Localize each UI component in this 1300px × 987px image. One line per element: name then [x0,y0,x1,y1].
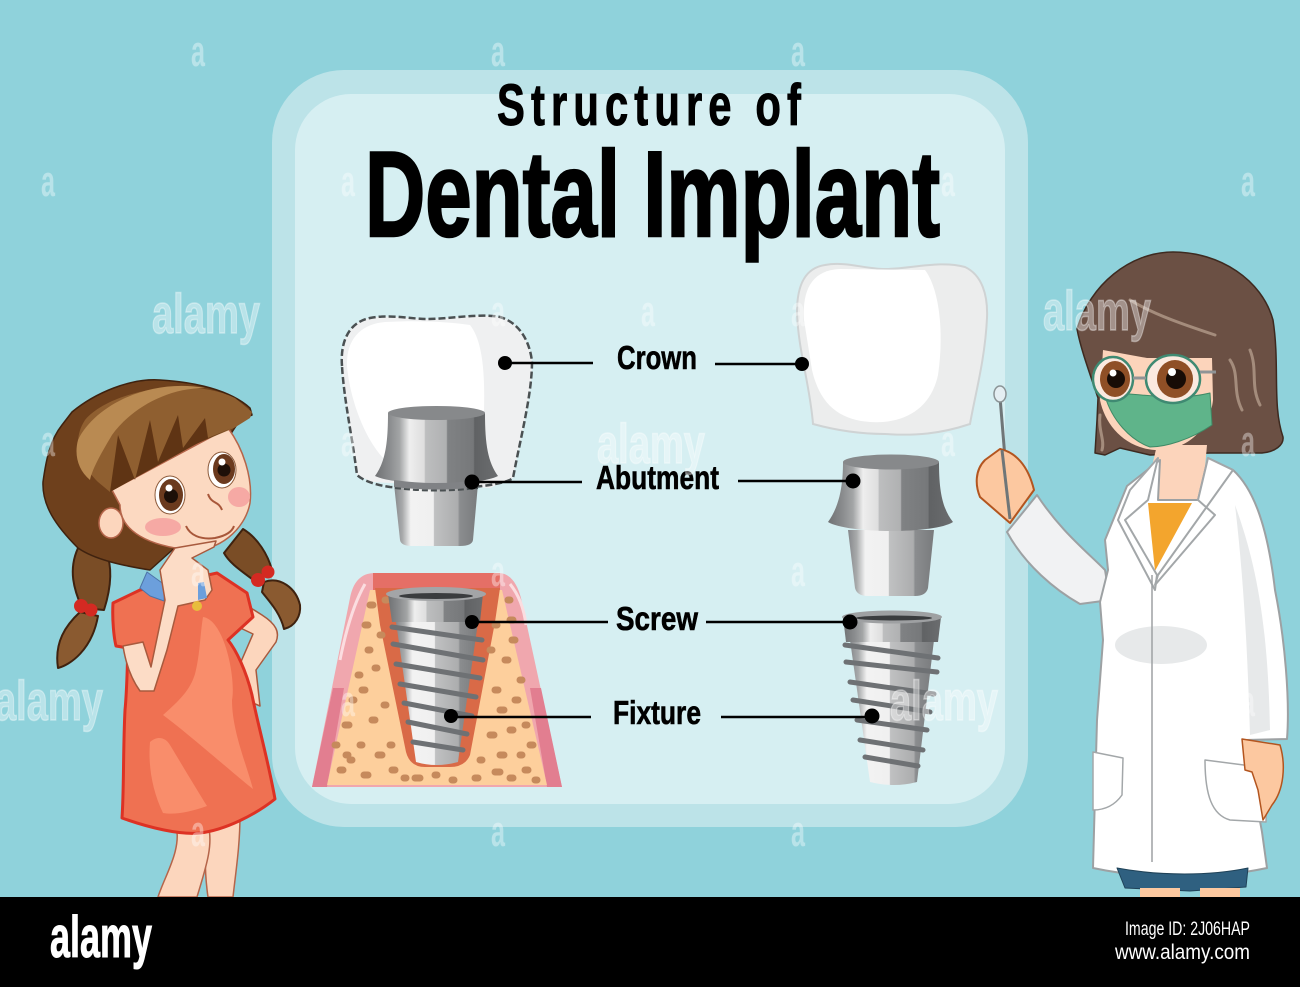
watermarks: alamy [890,669,998,732]
hair highlight [76,386,205,480]
neck [1143,445,1207,513]
girl character [43,380,300,897]
right braid [224,529,300,629]
raised hand [977,449,1034,523]
abutment [375,406,498,546]
watermarks: a [641,287,655,336]
raised arm and hand [123,541,216,691]
pockets [1093,752,1267,822]
part labels: Screw [616,600,698,637]
skirt [1117,868,1248,891]
shirt [1148,503,1192,571]
coat [1093,458,1288,877]
hair strands [110,415,232,492]
watermarks: a [791,287,805,336]
hair [1077,252,1283,455]
dress [113,573,275,833]
part labels: Abutment [596,459,719,496]
face [1100,350,1213,450]
crown with dashed outline [342,316,532,488]
watermarks: a [191,547,205,596]
watermarks: a [941,417,955,466]
part labels [596,339,719,731]
watermarks: a [1241,417,1255,466]
watermarks: a [491,807,505,856]
dress highlight [150,617,253,814]
right arm [232,603,277,706]
watermarks: a [491,547,505,596]
title: Dental Implant [365,126,940,262]
watermarks: a [341,157,355,206]
watermarks: alamy [152,282,260,345]
hair shade and curls [1100,300,1260,450]
watermarks: a [491,287,505,336]
face [112,428,251,550]
watermarks: a [191,27,205,76]
diagram: separated implant parts [797,264,987,785]
watermarks: a [1241,157,1255,206]
watermarks: a [41,157,55,206]
mirror tool [994,386,1010,519]
nose and mouth [186,494,234,538]
panel: outer frame [272,70,1028,827]
legs [158,815,240,897]
watermarks: a [491,27,505,76]
screw and fixture [842,610,942,785]
panel: inner card [295,94,1005,804]
hair fringe [78,387,252,492]
watermarks: a [341,677,355,726]
coat shading [1115,505,1270,735]
part labels: Crown [617,339,697,376]
eyes [155,452,236,514]
website: www.alamy.com [1114,941,1250,964]
watermarks: a [41,417,55,466]
footer bar [0,897,1300,987]
watermarks: alamy [597,412,705,475]
glasses and eyes [1093,355,1216,403]
left braid [57,548,110,668]
watermarks: a [941,157,955,206]
hair back [43,380,252,570]
part labels: Fixture [613,694,701,731]
watermarks: alamy [1043,279,1151,342]
bone and gum block [312,573,562,787]
diagram: assembled implant [312,316,562,787]
lower hand [1242,739,1283,820]
abutment [828,454,953,596]
legs [1140,888,1240,897]
tool handle over hand [1002,450,1010,519]
lapels [1118,458,1233,590]
screw and fixture [386,587,486,765]
title: Structure of [497,72,807,138]
watermarks: a [191,807,205,856]
crown [797,264,987,435]
necklace [192,582,207,611]
watermarks: a [791,27,805,76]
callout lines and dots [444,356,880,724]
left arm and sleeve [1007,495,1110,604]
watermarks: a [1241,677,1255,726]
title [365,72,940,262]
doctor character [977,252,1288,897]
coat centre seam [1151,575,1153,862]
ear [99,508,123,538]
image id: Image ID: 2J06HAP [1125,919,1250,940]
collar [140,572,165,601]
watermarks: a [791,547,805,596]
watermarks: a [341,417,355,466]
watermarks: a [791,807,805,856]
mask [1105,393,1212,447]
cheeks [145,487,250,536]
footer logo: alamy [50,905,152,970]
